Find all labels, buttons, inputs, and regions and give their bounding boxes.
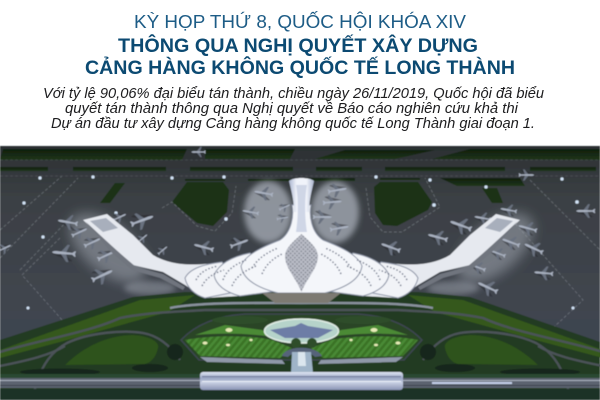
landside entrance [262,293,341,303]
rail corridor [0,378,600,388]
trees around plaza [212,316,391,348]
service road top [170,303,433,308]
intro paragraph: Với tỷ lệ 90,06% đại biểu tán thành, chiều ngày 26/11/2019, Quốc hội đã biểu [43,85,545,102]
heading line two: CẢNG HÀNG KHÔNG QUỐC TẾ LONG THÀNH [85,57,515,79]
west wing [83,214,240,298]
landscape and roads [0,292,600,400]
intro paragraph: quyết tán thành thông qua Nghị quyết về Báo cáo nghiên cứu khả thi [65,100,519,117]
lattice teardrop atrium [285,234,318,292]
header [43,11,545,132]
intro paragraph: Dự án đầu tư xây dựng Cảng hàng không quốc tế Long Thành giai đoạn 1. [51,115,535,132]
middle pods [214,253,285,296]
apron lights [22,175,579,310]
gate floodlight glow [57,181,546,296]
heading line one: THÔNG QUA NGHỊ QUYẾT XÂY DỰNG [118,35,478,57]
terminal building [83,178,520,303]
intro paragraph [43,85,545,132]
entry arch and glass walkway [282,348,322,357]
east wing [363,214,520,298]
grass islands [100,182,503,226]
lawn lights [202,328,400,346]
ring road [181,314,422,360]
runway grass strips [0,149,600,186]
lit grass bands [0,295,195,358]
outer pods [185,262,245,298]
lawn left [185,336,292,358]
wing shading [90,218,513,232]
title: session line: KỲ HỌP THỨ 8, QUỐC HỘI KHÓA XIV [134,11,467,32]
spire neck shading [296,185,307,232]
highway curves [0,310,600,398]
bottom tree strip [0,389,600,400]
oval plaza [264,319,338,343]
skylight perforations [196,248,407,286]
airport rendering [0,146,600,400]
oval lawns [65,335,158,365]
parked aircraft [0,147,595,299]
tree clumps [20,344,580,376]
landscape base [0,292,600,400]
taxiway markings [0,160,600,340]
terrace wall [200,357,403,364]
upper lawns [195,325,275,337]
central lawn and plaza [181,314,422,373]
lawn right [311,336,418,358]
apron background [0,146,600,400]
rail station [200,372,403,390]
central pod and spire [241,205,362,293]
